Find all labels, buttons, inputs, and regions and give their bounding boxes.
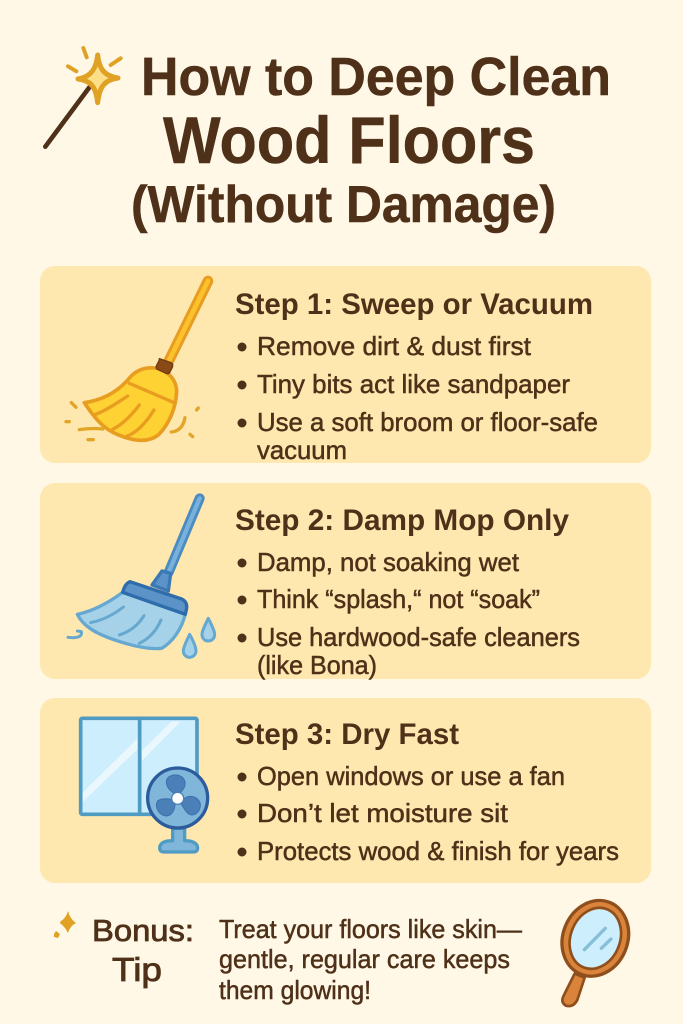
heading: bonus tip: Bonus:: [92, 913, 194, 948]
title: How to Deep Clean: [141, 47, 611, 107]
list: step 1 bullets: Remove dirt & dust first: [257, 331, 532, 361]
icon: magic wand with sparkle: [45, 48, 121, 147]
list: step 2 bullets: Damp, not soaking wet: [257, 547, 520, 577]
list: step 3 bullets: Protects wood & finish for years: [257, 836, 619, 866]
icon: window and fan: [81, 718, 208, 852]
heading: step 3: Step 3: Dry Fast: [235, 718, 459, 751]
list: step 2 bullets: [238, 547, 580, 680]
text: bonus tip message: [219, 914, 522, 1005]
heading: bonus tip: [92, 913, 194, 988]
list: step 1 bullets: Tiny bits act like sandpaper: [257, 369, 570, 399]
list: step 3 bullets: Open windows or use a fan: [257, 761, 565, 791]
list: step 2 bullets: Think “splash,“ not “soak”: [257, 584, 540, 614]
list: step 1 bullets: [238, 331, 598, 465]
heading: bonus tip: Tip: [112, 951, 162, 988]
text: bonus tip message: gentle, regular care keeps: [219, 944, 510, 974]
title: [131, 47, 611, 234]
list: step 1 bullets: Use a soft broom or floor-safe: [257, 407, 598, 437]
title: Wood Floors: [163, 103, 535, 177]
title: (Without Damage): [131, 176, 556, 234]
icon: bonus sparkles: [54, 911, 76, 938]
list: step 2 bullets: Use hardwood-safe cleaners: [257, 622, 580, 652]
list: step 3 bullets: Don’t let moisture sit: [257, 798, 509, 828]
list: step 1 bullets: vacuum: [257, 435, 347, 465]
panel: step 3: [40, 698, 651, 883]
text: bonus tip message: them glowing!: [219, 975, 371, 1005]
panel: step 1: [40, 266, 651, 465]
list: step 3 bullets: [238, 761, 619, 866]
heading: step 1: Step 1: Sweep or Vacuum: [235, 288, 593, 321]
text: bonus tip message: Treat your floors like skin—: [219, 914, 522, 944]
panel: step 2: [40, 483, 651, 680]
icon: hand mirror: [551, 890, 640, 1006]
icon: broom: [66, 281, 208, 440]
heading: step 2: Step 2: Damp Mop Only: [235, 504, 570, 537]
list: step 2 bullets: (like Bona): [257, 650, 377, 680]
icon: damp mop: [68, 498, 215, 657]
